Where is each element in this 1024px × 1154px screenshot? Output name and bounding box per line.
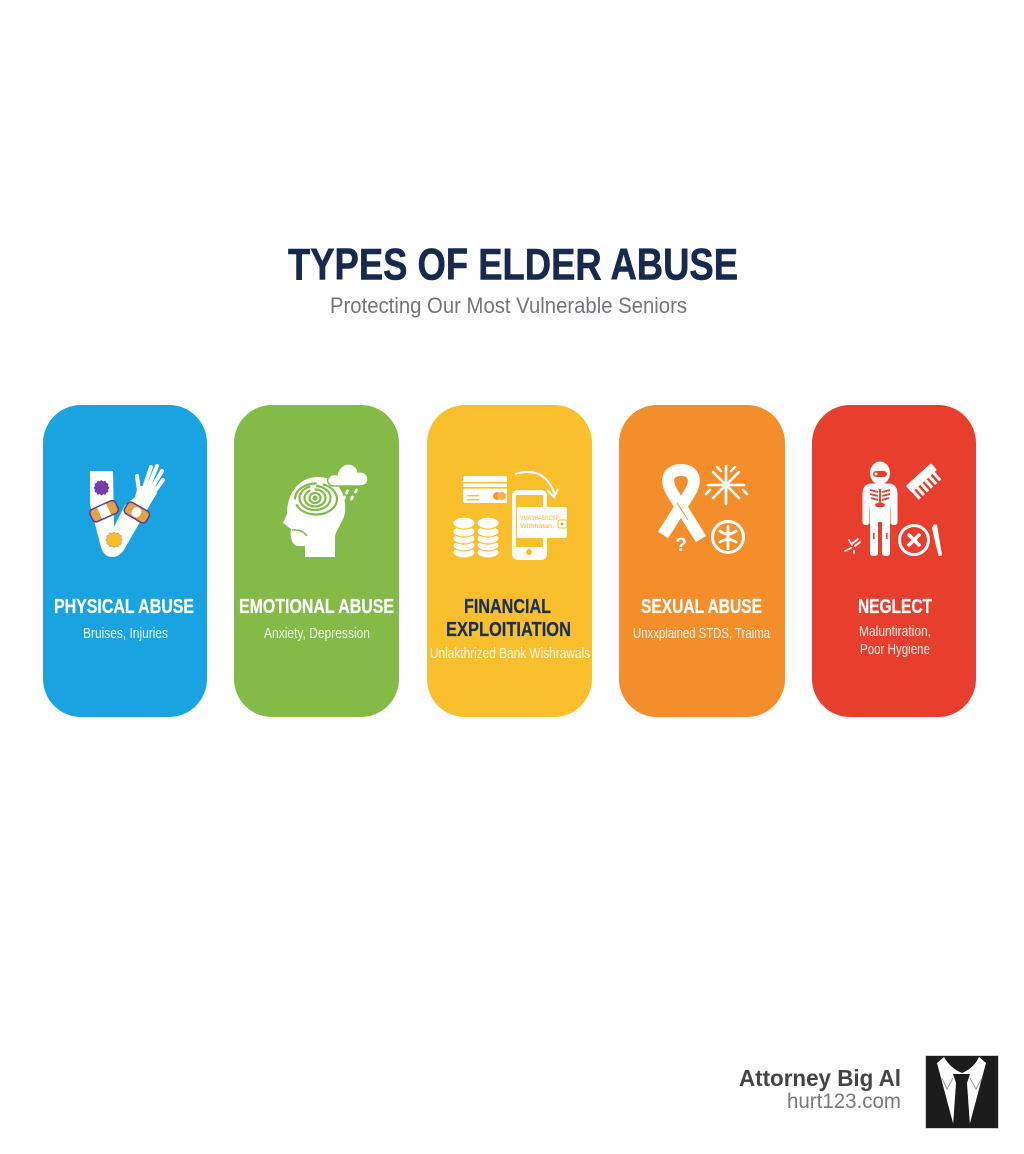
icon: ribbon, burst and circled symbol: ? (675, 535, 687, 556)
subtitle: Protecting Our Most Vulnerable Seniors (330, 293, 687, 318)
heading: NEGLECT (858, 596, 932, 618)
heading: PHYSICAL ABUSE (54, 596, 194, 618)
description: Maluntiration, (859, 623, 931, 640)
title: TYPES OF ELDER ABUSE (288, 240, 738, 290)
heading: EXPLOITIATION (446, 619, 571, 641)
icon: ribbon, burst and circled symbol (663, 466, 747, 556)
heading: EMOTIONAL ABUSE (239, 596, 394, 618)
description: Anxiety, Depression (264, 625, 370, 642)
description: Bruises, Injuries (83, 625, 168, 642)
heading: SEXUAL ABUSE (641, 596, 762, 618)
icon: card, coins, phone and wallet: VMASHASSCSP (520, 515, 559, 522)
icon: card, coins, phone and wallet: Withhalan. (520, 523, 554, 530)
heading: FINANCIAL (464, 596, 551, 618)
panel: physical abuse (43, 405, 207, 717)
panel: financial exploitation (427, 405, 592, 717)
description: Unlakthrized Bank Wishrawals (430, 645, 590, 662)
panel: sexual abuse (619, 405, 785, 717)
icon: injured arm with bandages (89, 466, 163, 557)
icon: frail body, comb, empty plate and knife (845, 462, 944, 556)
icon: card, coins, phone and wallet (453, 472, 567, 560)
brand url: hurt123.com (787, 1090, 901, 1113)
panel: emotional abuse (234, 405, 399, 717)
description: Unxxplained STDS, Traima (633, 625, 770, 642)
description: Poor Hygiene (860, 641, 930, 658)
panel: neglect (812, 405, 976, 717)
brand name: Attorney Big Al (739, 1065, 901, 1091)
description (859, 623, 931, 658)
icon: head with spiral and rain cloud (283, 464, 368, 557)
logo: suit and tie (926, 1056, 998, 1128)
heading (446, 596, 571, 641)
